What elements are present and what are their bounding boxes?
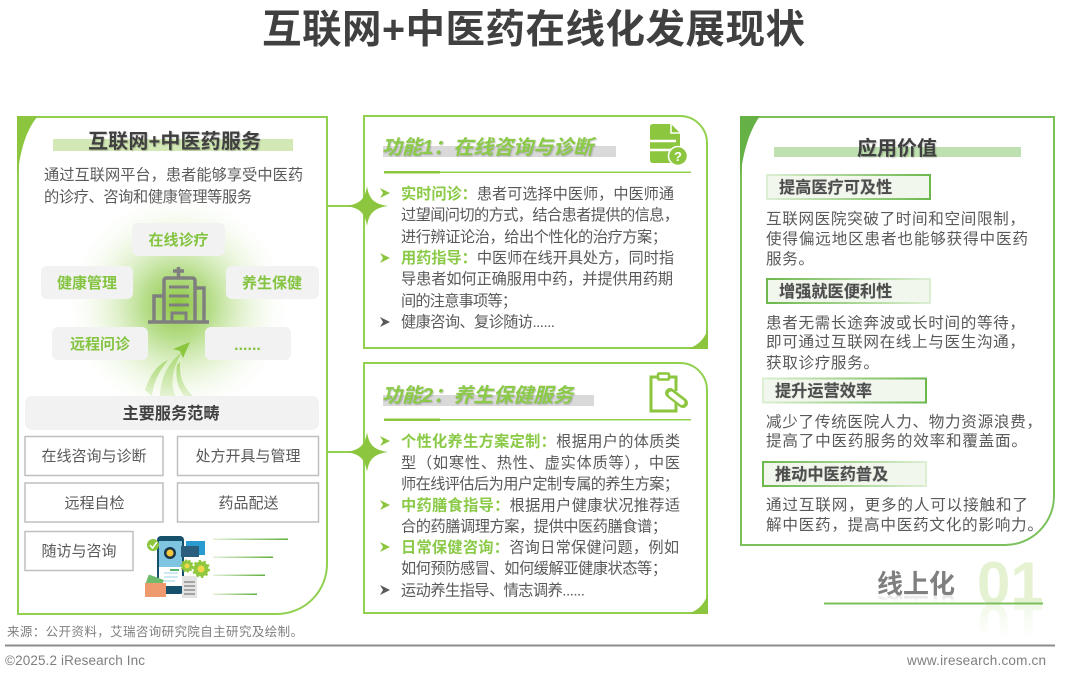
section marker: online 01: 线上化 (877, 591, 955, 621)
list: function 2 items: 如何预防感冒、如何缓解亚健康状态等； (401, 560, 667, 578)
scope heading: 主要服务范畴 (122, 404, 220, 423)
decorative legend lines (213, 538, 288, 595)
item: efficiency: 提高了中医药服务的效率和覆盖面。 (766, 432, 1027, 450)
list: function 1 items: 用药指导：中医师在线开具处方，同时指 (401, 249, 674, 267)
tag: health management: 健康管理 (57, 274, 117, 292)
section marker: online 01: 线上化 (877, 569, 955, 599)
item: accessibility: 提高医疗可及性 (779, 178, 892, 197)
source note: 来源：公开资料，艾瑞咨询研究院自主研究及绘制。 (7, 624, 303, 639)
icon: star connector 2 (346, 432, 388, 472)
tag: more: ...... (234, 337, 261, 354)
item: efficiency: 减少了传统医院人力、物力资源浪费， (766, 412, 1042, 431)
divider (384, 171, 691, 174)
intro text: 通过互联网平台，患者能够享受中医药 (44, 167, 303, 184)
item: convenience: 增强就医便利性 (779, 282, 892, 301)
list: function 2 items: 型（如寒性、热性、虚实体质等），中医 (401, 454, 680, 472)
item: accessibility (766, 175, 1028, 268)
connector: left panel to function 1 (328, 205, 352, 207)
heading: 功能2：养生保健服务 (382, 384, 575, 407)
icon: clipboard and pencil (651, 374, 683, 411)
tag: online treatment: 在线诊疗 (148, 231, 209, 249)
list: function 2 items: 合的药膳调理方案，提供中医药膳食谱； (401, 518, 667, 536)
tag: more (205, 327, 291, 360)
list: function 1 items: 进行辨证论治，给出个性化的治疗方案； (401, 228, 667, 246)
item: popularisation: 推动中医药普及 (775, 465, 888, 484)
panel corner accent (687, 327, 708, 349)
panel heading (774, 136, 1021, 160)
panel: function 1 online consultation (364, 116, 708, 349)
scope: prescription (178, 436, 318, 476)
copyright: ©2025.2 iResearch Inc (5, 653, 145, 668)
icon: star connector 1 (346, 186, 388, 226)
list: function 2 items: 师在线评估后为用户定制专属的养生方案； (401, 475, 679, 493)
panel: function 2 wellness (364, 363, 708, 614)
service hub diagram (41, 190, 319, 420)
item: convenience (766, 279, 1025, 372)
arrow: upward swoosh (145, 342, 195, 398)
item: accessibility: 互联网医院突破了时间和空间限制， (766, 209, 1025, 228)
icon: document with question mark (650, 124, 688, 166)
scope: online consultation (25, 436, 163, 476)
list: function 1 items (380, 185, 679, 331)
list: function 1 items: 导患者如何正确服用中药，并提供用药期 (401, 271, 673, 288)
list: function 1 items: 健康咨询、复诊随访...... (401, 314, 555, 331)
scope: follow-up (25, 532, 133, 570)
panel heading: 应用价值 (857, 136, 937, 160)
panel corner accent (740, 116, 760, 180)
icon: hospital (148, 267, 209, 322)
panel: application value (740, 116, 1054, 545)
item: accessibility: 服务。 (766, 250, 814, 268)
intro text (44, 167, 303, 206)
intro text: 的诊疗、咨询和健康管理等服务 (44, 188, 252, 206)
list: function 2 items: 个性化养生方案定制：根据用户的体质类 (401, 432, 680, 450)
list: function 2 items: 运动养生指导、情志调养...... (401, 582, 585, 600)
heading: 功能1：在线咨询与诊断 (382, 136, 597, 159)
panel corner accent (687, 592, 708, 614)
item: efficiency: 提升运营效率 (775, 382, 872, 400)
item: popularisation: 通过互联网，更多的人可以接触和了 (766, 496, 1028, 514)
item: popularisation (763, 462, 1043, 534)
panel: internet + TCM services (17, 116, 327, 614)
panel corner accent (17, 116, 38, 180)
scope: remote self-check: 远程自检 (64, 495, 125, 512)
list: function 1 items: 实时问诊：患者可选择中医师，中医师通 (401, 185, 674, 203)
list: function 2 items: 日常保健咨询：咨询日常保健问题，例如 (401, 538, 679, 556)
section marker: online 01: 01 (977, 550, 1044, 617)
item: popularisation: 解中医药，提高中医药文化的影响力。 (766, 516, 1043, 534)
icon: document with question mark: ? (674, 149, 682, 164)
tag: remote consultation (52, 327, 148, 360)
scope heading (25, 396, 319, 430)
scope: drug delivery (178, 483, 318, 522)
title: 互联网+中医药在线化发展现状 (262, 8, 805, 52)
section marker: online 01: 01 (977, 591, 1044, 658)
tag: wellness: 养生保健 (242, 274, 302, 292)
scope: online consultation: 在线咨询与诊断 (41, 448, 147, 465)
tag: remote consultation: 远程问诊 (70, 335, 130, 353)
list: function 1 items: 间的注意事项等； (401, 292, 517, 310)
scope: drug delivery: 药品配送 (218, 495, 279, 512)
icon: mobile health illustration (145, 536, 209, 598)
website: www.iresearch.com.cn (906, 653, 1046, 668)
scope: remote self-check (25, 483, 163, 522)
section marker: online 01 (824, 550, 1044, 658)
item: convenience: 即可通过互联网在线上与医生沟通， (766, 333, 1025, 351)
list: function 2 items (380, 432, 680, 600)
scope: prescription: 处方开具与管理 (195, 448, 301, 465)
divider (384, 418, 691, 421)
panel heading: 互联网+中医药服务 (88, 130, 261, 153)
item: accessibility: 使得偏远地区患者也能够获得中医药 (766, 230, 1028, 248)
panel heading (53, 130, 293, 153)
footer rule (5, 644, 1055, 646)
scope: follow-up: 随访与咨询 (41, 543, 117, 560)
item: convenience: 患者无需长途奔波或长时间的等待， (766, 314, 1025, 332)
list: function 2 items: 中药膳食指导：根据用户健康状况推荐适 (401, 496, 680, 514)
tag: health management (41, 266, 133, 299)
connector: left panel to function 2 (328, 451, 352, 453)
item: efficiency (763, 378, 1042, 450)
item: convenience: 获取诊疗服务。 (766, 354, 879, 372)
list: function 1 items: 过望闻问切的方式，结合患者提供的信息， (401, 207, 679, 224)
tag: online treatment (132, 223, 225, 256)
tag: wellness (226, 266, 319, 299)
